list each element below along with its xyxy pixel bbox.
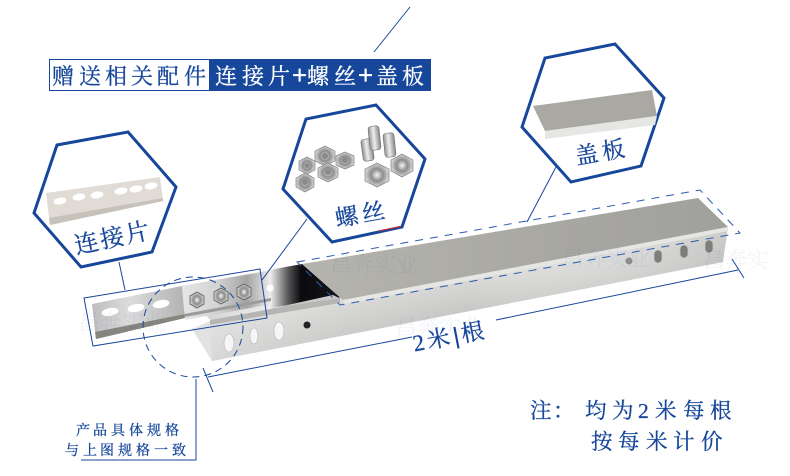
tray product photo [92,198,728,361]
spec note with leader [65,379,196,460]
length dimension line [203,259,744,392]
banner text: parts list: 连 [215,64,237,89]
watermarks [78,246,769,340]
label: cover: 盖板 [573,135,631,169]
tray cover top [302,198,728,300]
banner text: parts list: 丝 [334,64,356,89]
banner text: parts list: 片 [268,64,290,89]
connector bolts [190,284,251,308]
dashed detail circle [143,277,243,377]
banner text: parts list: + [358,60,373,90]
tray side slots [224,322,284,352]
watermarks: 昌奔实业 [330,252,418,277]
icon: cover plate [533,90,657,139]
banner text: parts list: + [292,60,307,90]
pricing note [530,399,732,454]
watermarks: 昌奔实业 [395,315,483,340]
hexagon: screws [283,105,425,242]
spec note line 2: 与上图规格一致 [65,442,186,459]
top diagonal line [374,7,410,52]
hexagon: cover plate [522,44,664,182]
cover dashed outline [297,190,740,305]
watermarks: 昌奔实业 [562,246,650,271]
note line 2: 按每米计价 [591,430,723,454]
watermarks: 昌奔实 [703,248,769,273]
banner text: parts list: 螺 [307,64,330,89]
tray front side [210,227,728,361]
length label: 2米|根 [411,318,486,356]
connector frame [84,269,267,346]
banner text: parts list: 盖 [376,64,398,89]
hexagon leader lines [119,167,556,290]
connector piece [92,286,185,339]
banner text: parts list: 板 [402,64,424,89]
tray flared end [192,321,212,361]
icon: connector strip [46,177,163,225]
tray far wall and interior [182,264,343,320]
hexagon: connector piece [34,132,176,267]
label: connector: 连接片 [72,217,154,260]
note line 1: 注：均为2米每根 [530,399,732,423]
header banner [50,59,431,91]
watermarks: 昌奔实业 [78,310,166,335]
spec note line 1: 产品具体规格 [76,422,179,439]
banner text: free accessories: 赠送相关配件 [52,64,206,89]
label: screws: 螺丝 [333,197,391,231]
icon: screws and nuts [296,126,413,192]
banner text: parts list: 接 [242,64,265,89]
